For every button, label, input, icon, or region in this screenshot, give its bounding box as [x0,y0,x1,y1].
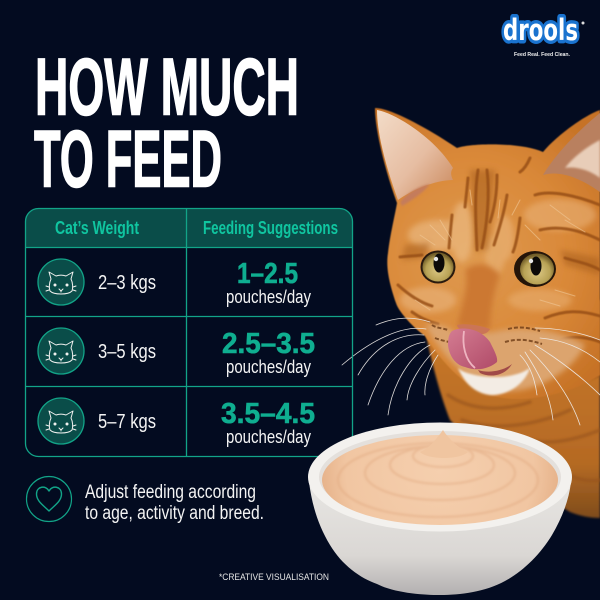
row 2 [38,328,315,377]
right ear inner [543,113,600,192]
icon: cat [38,328,84,374]
tongue [448,329,497,369]
food [322,435,558,525]
muzzle [425,324,585,391]
tabby stripes [398,158,600,342]
bowl inner wall [319,431,561,523]
cat head [375,108,600,399]
forehead dark patches [402,170,600,275]
right ear light fur [565,140,600,178]
header: feeding suggestions: Feeding Suggestions [203,217,338,238]
feeding table [26,208,352,456]
left ear inner [377,110,453,200]
unit: pouches/day [226,427,311,447]
whiskers [342,318,600,425]
icon: cat [38,259,84,305]
neck fur stripes [448,375,600,481]
row 3 [38,398,315,447]
title: HOW MUCH [35,42,299,132]
left eye [420,250,456,284]
cat photo [342,108,600,518]
amount: 1–2.5 [237,258,298,290]
feeding note: to age, activity and breed. [85,503,264,524]
food peak [420,430,468,458]
tongue crease [463,331,475,368]
feeding note [85,482,264,524]
registered mark [582,22,584,24]
fine fur strokes [415,190,585,310]
fur highlights [400,199,596,313]
cat body [425,300,600,518]
nose [457,324,490,334]
row 1 [38,258,311,307]
icon: cat [38,398,84,444]
nose bridge [457,265,500,330]
bowl body [309,482,571,595]
icon: heart [26,476,72,522]
unit: pouches/day [226,287,311,307]
title [34,42,299,204]
unit: pouches/day [226,357,311,377]
right eye [514,251,556,287]
mouth [478,364,512,376]
logo tagline: Feed Real. Feed Clean. [514,52,570,58]
bowl of food [308,422,572,595]
disclaimer: *CREATIVE VISUALISATION [219,572,329,583]
bowl rim [308,422,572,532]
table grid [26,208,352,456]
header: cat's weight: Cat’s Weight [55,217,139,238]
weight label: 5–7 kgs [98,411,156,433]
muzzle dark stripes [432,325,542,344]
amount: 3.5–4.5 [221,398,315,430]
title: TO FEED [34,114,222,204]
food swirl grooves [338,443,538,517]
weight label: 2–3 kgs [98,272,156,294]
feeding note: Adjust feeding according [85,482,256,503]
weight label: 3–5 kgs [98,341,156,363]
amount: 2.5–3.5 [222,328,315,360]
chin [458,368,530,395]
logo: drools [503,13,584,58]
left ear lower shade [400,184,430,206]
table header band [26,208,352,248]
